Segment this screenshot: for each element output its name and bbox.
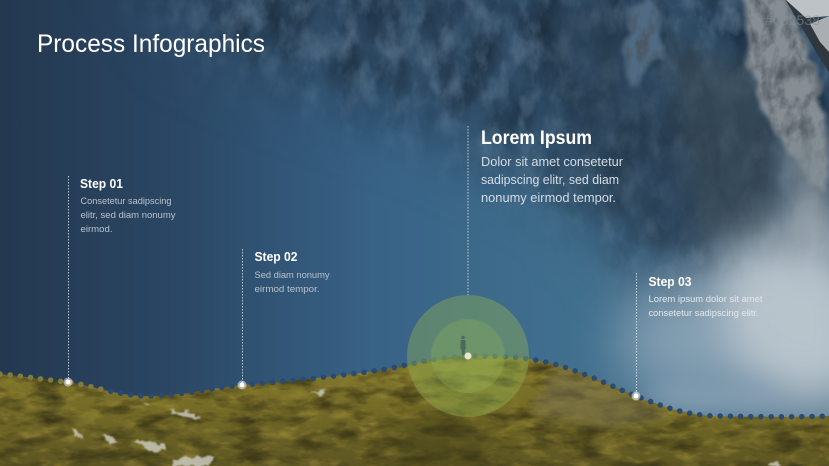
heading: step 03: Step 03 — [648, 275, 692, 289]
background: grassy ridge — [0, 356, 829, 466]
text: lorem ipsum: Dolor sit amet consetetur — [481, 155, 623, 169]
text: lorem ipsum: sadipscing elitr, sed diam — [481, 173, 619, 187]
snow patches — [72, 390, 782, 466]
slope shading — [530, 368, 672, 428]
main callout — [464, 126, 623, 360]
text: step 03: consetetur sadipscing elitr. — [648, 308, 758, 319]
marker: main — [464, 352, 472, 360]
text: step 01: eirmod. — [80, 224, 112, 235]
icon: standing person silhouette — [460, 336, 466, 355]
step 03 — [632, 273, 763, 400]
text: step 02 — [254, 270, 330, 295]
background: fog clouds — [625, 205, 829, 416]
background: rocky mountain face — [171, 0, 829, 296]
text: lorem ipsum — [481, 155, 623, 205]
heading: lorem ipsum: Lorem Ipsum — [481, 128, 592, 149]
text: step 03 — [648, 294, 763, 319]
text: step 01: elitr, sed diam nonumy — [80, 210, 176, 221]
text: step 03: Lorem ipsum dolor sit amet — [648, 294, 763, 305]
text: step 01: Consetetur sadipscing — [80, 196, 172, 207]
ghost code text: #082538 — [765, 12, 820, 28]
heading: step 01: Step 01 — [80, 177, 123, 191]
ridge dotted line — [0, 356, 829, 417]
marker: step 03 — [632, 392, 640, 400]
marker: step 01 — [64, 378, 72, 386]
highlight: concentric green circles around the figure — [407, 295, 529, 417]
text: step 01 — [80, 196, 176, 235]
text: step 02: Sed diam nonumy — [254, 270, 330, 281]
step 01 — [64, 176, 176, 386]
step 02 — [238, 249, 330, 390]
marker: step 02 — [238, 380, 246, 390]
text: step 02: eirmod tempor. — [254, 284, 320, 295]
text: lorem ipsum: nonumy eirmod tempor. — [481, 191, 616, 205]
heading: step 02: Step 02 — [254, 250, 298, 264]
title: Process Infographics — [37, 30, 265, 58]
